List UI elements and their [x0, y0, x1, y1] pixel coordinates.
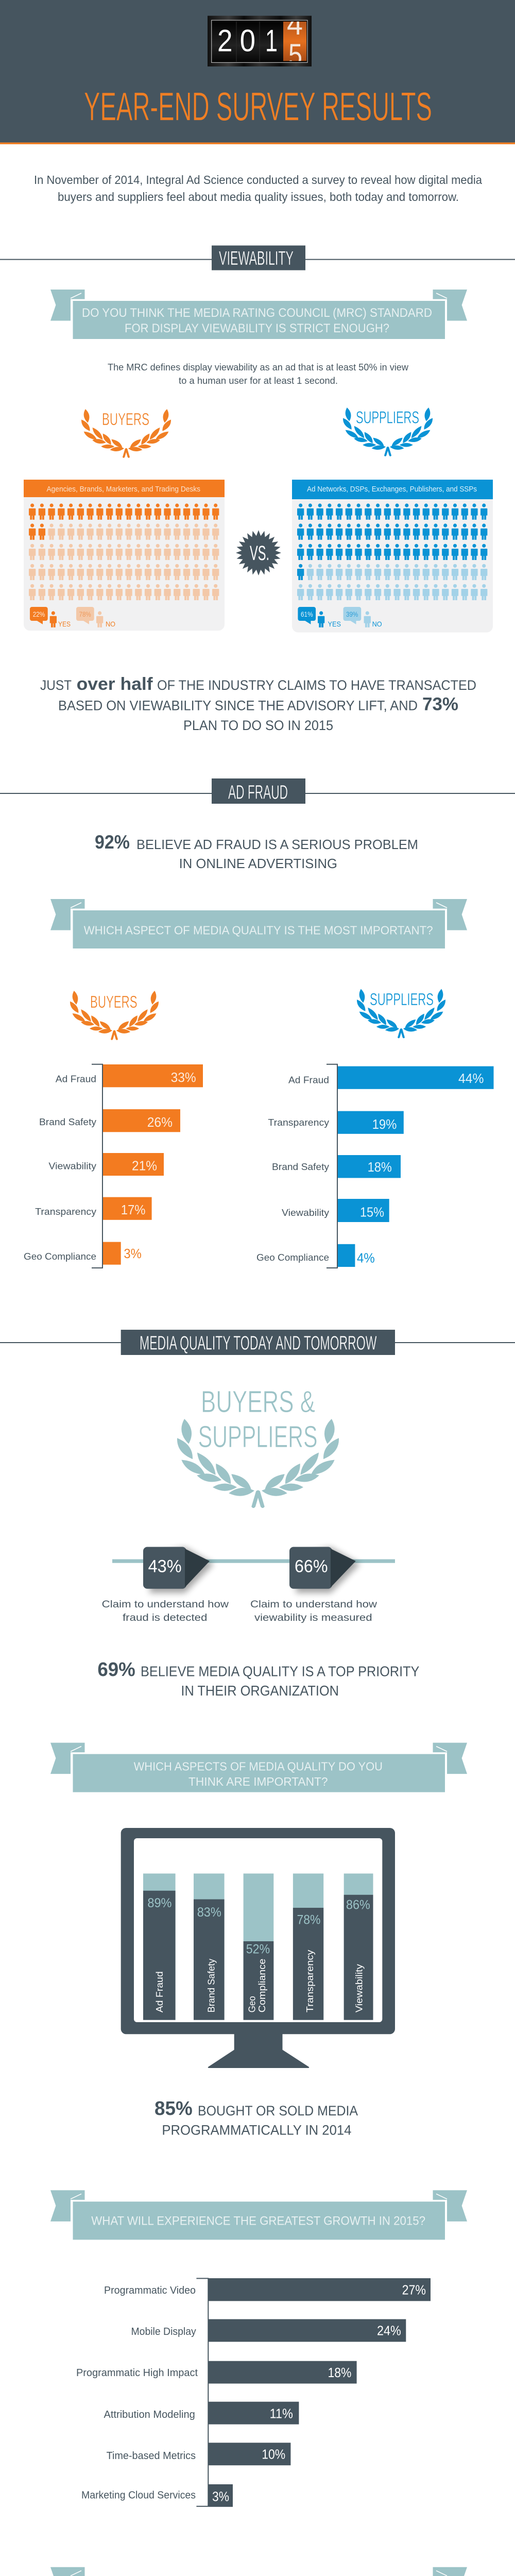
stat: over half and 73 percent: 73%: [422, 694, 458, 715]
timeline with percentage tags: [102, 1547, 395, 1623]
bar chart: growth in 2015: Mobile Display: [131, 2326, 196, 2337]
ribbon: important aspects: WHICH ASPECTS OF MEDIA QUALITY DO YOU: [134, 1760, 383, 1773]
ribbon: MRC question: FOR DISPLAY VIEWABILITY IS STRICT ENOUGH?: [125, 321, 389, 335]
bar chart: suppliers: 19%: [372, 1116, 397, 1132]
panel: suppliers pictogram: [292, 480, 493, 633]
text: MRC definition: The MRC defines display viewability as an ad that is at least 50% in view: [108, 362, 409, 372]
bar chart: buyers: Brand Safety: [39, 1117, 96, 1127]
tag: 43 percent: 43%: [148, 1557, 182, 1577]
stat: over half and 73 percent: over half: [77, 674, 153, 694]
caption: fraud detection: Claim to understand how: [102, 1599, 229, 1610]
bar chart: buyers: Geo Compliance: [24, 1251, 96, 1262]
legend: buyers yes and no: 78%: [79, 610, 91, 618]
bar chart: buyers: Ad Fraud: [56, 1074, 96, 1084]
icon: year counter 2014 to 2015: 1: [265, 24, 278, 58]
wreath: buyers 2: [70, 991, 159, 1040]
bar chart: suppliers: 44%: [458, 1071, 484, 1086]
legend: suppliers yes and no: YES: [328, 620, 341, 628]
badge: VS: [236, 530, 281, 575]
bar: transparency: 78%: [297, 1913, 320, 1927]
badge: VS: VS.: [250, 542, 269, 565]
bar chart: growth in 2015: Time-based Metrics: [107, 2450, 196, 2462]
ribbon: MRC question: [50, 290, 467, 339]
bar: geo compliance: Compliance: [257, 1959, 267, 2012]
caption: viewability measurement: viewability is measured: [254, 1613, 372, 1623]
stat: 92 percent: [95, 832, 418, 871]
bar chart: suppliers: 15%: [360, 1205, 384, 1220]
bar chart: suppliers: 4%: [357, 1250, 375, 1266]
ribbon: important aspects: [50, 1743, 467, 1792]
bar: geo compliance: 52%: [246, 1942, 270, 1957]
wreath: buyers and suppliers: SUPPLIERS: [198, 1420, 318, 1454]
stat: 92 percent: BELIEVE AD FRAUD IS A SERIOUS PROBLEM: [136, 837, 418, 852]
bar: geo compliance: Geo: [247, 1996, 258, 2012]
bar chart: growth in 2015: Programmatic High Impact: [76, 2367, 198, 2379]
bar chart: growth in 2015: 3%: [212, 2489, 229, 2504]
legend: buyers yes and no: YES: [58, 620, 71, 628]
bar chart: buyers: 17%: [121, 1202, 145, 1217]
wreath: suppliers 2: [357, 989, 445, 1038]
caption: viewability measurement: Claim to understand how: [250, 1599, 377, 1610]
wreath: buyers and suppliers: BUYERS &: [201, 1385, 315, 1419]
section heading: viewability: VIEWABILITY: [219, 248, 294, 269]
stat: over half and 73 percent: [40, 674, 476, 733]
bar chart: growth in 2015: Programmatic Video: [104, 2285, 196, 2296]
icon: year counter 2014 to 2015: [208, 15, 312, 66]
pictogram: 22 percent yes: [29, 503, 219, 600]
section heading: media quality today and tomorrow: [0, 1330, 515, 1355]
wreath: buyers and suppliers: [177, 1385, 339, 1508]
panel: suppliers pictogram: Ad Networks, DSPs, Exchanges, Publishers, and SSPs: [307, 485, 477, 494]
wreath: suppliers: SUPPLIERS: [356, 408, 419, 427]
intro text: buyers and suppliers feel about media quality issues, both today and tomorrow.: [58, 190, 459, 204]
bar chart: buyers: Viewability: [48, 1161, 96, 1172]
wreath: buyers: BUYERS: [102, 410, 149, 429]
stat: 85 percent: BOUGHT OR SOLD MEDIA: [198, 2103, 358, 2119]
icon: year counter 2014 to 2015: 0: [240, 24, 255, 58]
panel: buyers pictogram: Agencies, Brands, Marketers, and Trading Desks: [46, 485, 200, 494]
bar chart: suppliers: Viewability: [282, 1208, 329, 1218]
bar: brand safety: 83%: [197, 1905, 221, 1920]
tag: 66 percent: [289, 1547, 360, 1593]
bar chart: growth in 2015: 18%: [328, 2365, 351, 2380]
section heading: ad fraud: [0, 778, 515, 804]
bar: viewability: 86%: [346, 1897, 370, 1912]
ribbon: greatest growth: WHAT WILL EXPERIENCE THE GREATEST GROWTH IN 2015?: [91, 2214, 425, 2228]
bar chart: suppliers: 18%: [368, 1159, 392, 1175]
bar chart: suppliers: Ad Fraud: [288, 1075, 329, 1086]
stat: 69 percent: 69%: [97, 1659, 135, 1681]
bar chart: buyers: 21%: [132, 1158, 157, 1174]
wreath: buyers 2: BUYERS: [90, 992, 138, 1011]
bar: ad fraud: [143, 1873, 176, 2020]
bar chart: suppliers: Geo Compliance: [256, 1252, 329, 1263]
legend: suppliers yes and no: [298, 607, 382, 628]
stat: 85 percent: 85%: [154, 2098, 193, 2120]
icon: monitor: [121, 1828, 395, 2068]
text: MRC definition: [108, 362, 409, 386]
bar chart: suppliers: [256, 1064, 493, 1268]
icon: year counter 2014 to 2015: 5: [288, 38, 302, 72]
stat: over half and 73 percent: BASED ON VIEWABILITY SINCE THE ADVISORY LIFT, AND: [58, 698, 418, 714]
bar: viewability: Viewability: [354, 1964, 364, 2012]
bar: brand safety: [194, 1873, 225, 2020]
stat: 69 percent: [97, 1659, 420, 1699]
header banner: [0, 0, 515, 144]
bar chart: suppliers: Brand Safety: [272, 1162, 329, 1172]
stat: over half and 73 percent: JUST: [40, 677, 72, 693]
ribbon: important aspects: THINK ARE IMPORTANT?: [188, 1775, 328, 1788]
ribbon: greatest growth: [50, 2190, 467, 2240]
intro text: [34, 173, 482, 204]
bar chart: buyers: Transparency: [35, 1207, 96, 1217]
ribbon: most important aspect: WHICH ASPECT OF MEDIA QUALITY IS THE MOST IMPORTANT?: [84, 924, 433, 937]
caption: viewability measurement: [250, 1599, 377, 1623]
section heading: ad fraud: AD FRAUD: [228, 782, 288, 804]
bar chart: buyers: 33%: [171, 1070, 196, 1085]
wreath: suppliers 2: SUPPLIERS: [370, 990, 434, 1009]
bar: ad fraud: Ad Fraud: [154, 1971, 165, 2012]
bar: transparency: [293, 1873, 323, 2020]
icon: year counter 2014 to 2015: 2: [217, 24, 233, 58]
bar chart: growth in 2015: Attribution Modeling: [104, 2409, 195, 2420]
stat: 92 percent: IN ONLINE ADVERTISING: [179, 856, 337, 871]
legend: suppliers yes and no: 61%: [301, 610, 313, 618]
ribbon: most important aspect: [50, 899, 467, 948]
ribbon: challenges and opportunities: [50, 2567, 467, 2576]
bar chart: growth in 2015: 24%: [377, 2323, 401, 2338]
bar chart: growth in 2015: 11%: [270, 2405, 293, 2421]
legend: suppliers yes and no: NO: [372, 620, 382, 628]
tag: 66 percent: 66%: [295, 1557, 328, 1577]
bar chart: growth in 2015: Marketing Cloud Services: [81, 2489, 196, 2501]
bar chart: buyers: 26%: [147, 1114, 173, 1130]
legend: buyers yes and no: NO: [106, 620, 115, 628]
ribbon: MRC question: DO YOU THINK THE MEDIA RATING COUNCIL (MRC) STANDARD: [82, 306, 432, 320]
stat: 69 percent: BELIEVE MEDIA QUALITY IS A TOP PRIORITY: [141, 1664, 420, 1680]
wreath: buyers: [81, 409, 171, 458]
bar chart: growth in 2015: 27%: [402, 2282, 426, 2298]
icon: year counter 2014 to 2015: 4: [287, 7, 303, 41]
bar: ad fraud: 89%: [147, 1896, 172, 1910]
monitor bar chart: [121, 1828, 395, 2068]
pictogram: 61 percent yes: [297, 503, 487, 600]
stat: 69 percent: IN THEIR ORGANIZATION: [181, 1683, 339, 1699]
intro text: In November of 2014, Integral Ad Science conducted a survey to reveal how digital media: [34, 173, 482, 187]
bar: brand safety: Brand Safety: [206, 1959, 216, 2012]
bar: geo compliance: [244, 1873, 273, 2020]
stat: over half and 73 percent: OF THE INDUSTRY CLAIMS TO HAVE TRANSACTED: [157, 677, 476, 693]
wreath: suppliers: [343, 408, 433, 456]
bar chart: growth in 2015: 10%: [262, 2446, 285, 2462]
bar chart: growth in 2015: [76, 2278, 431, 2507]
stat: 92 percent: 92%: [95, 832, 130, 853]
section heading: viewability: [0, 245, 515, 270]
stat: 85 percent: PROGRAMMATICALLY IN 2014: [162, 2122, 351, 2138]
legend: buyers yes and no: [30, 607, 115, 628]
stat: over half and 73 percent: PLAN TO DO SO IN 2015: [183, 718, 333, 733]
legend: suppliers yes and no: 39%: [346, 610, 358, 618]
text: MRC definition: to a human user for at least 1 second.: [179, 376, 338, 386]
panel: buyers pictogram: [24, 480, 225, 631]
caption: fraud detection: [102, 1599, 229, 1623]
tag: 43 percent: [143, 1547, 214, 1593]
bar: transparency: Transparency: [305, 1950, 315, 2012]
caption: fraud detection: fraud is detected: [123, 1613, 207, 1623]
bar chart: suppliers: Transparency: [268, 1117, 329, 1128]
bar chart: buyers: [24, 1064, 203, 1268]
stat: 85 percent: [154, 2098, 358, 2138]
bar: viewability: [344, 1873, 373, 2020]
bar chart: buyers: 3%: [124, 1246, 142, 1261]
legend: buyers yes and no: 22%: [33, 610, 45, 618]
